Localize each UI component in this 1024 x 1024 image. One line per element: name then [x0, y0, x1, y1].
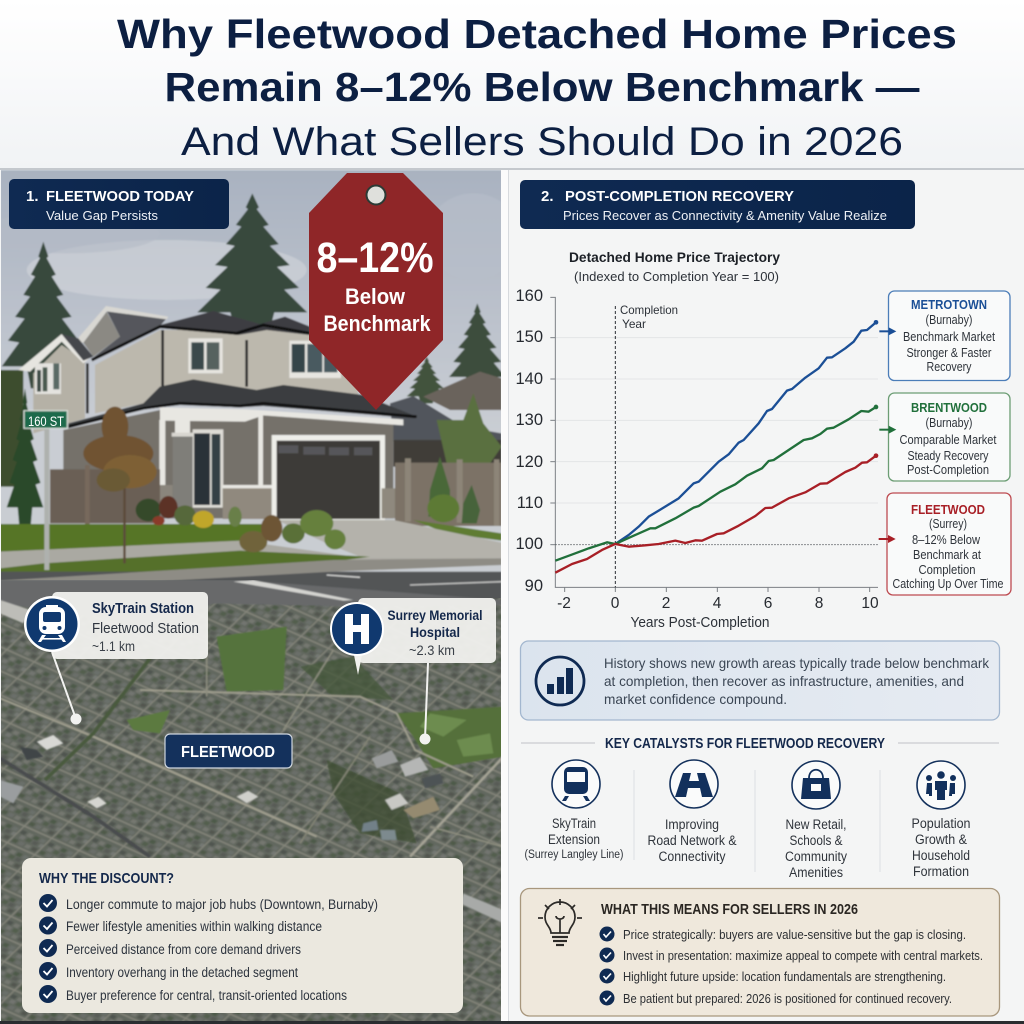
line chart: detached home price trajectory: Detached Home Price Trajectory	[569, 249, 780, 265]
price tag: 8-12% below benchmark: Below	[345, 284, 406, 309]
line chart: detached home price trajectory: Year	[622, 317, 646, 331]
map label: Fleetwood	[165, 734, 292, 768]
section heading 1: Value Gap Persists	[46, 208, 159, 223]
lower storey	[63, 410, 393, 518]
title header	[0, 0, 1024, 170]
panel: what this means for sellers	[520, 888, 1000, 1016]
map label: Fleetwood: FLEETWOOD	[181, 744, 275, 761]
catalyst: SkyTrain extension	[524, 760, 624, 861]
aerial map of Fleetwood	[0, 580, 503, 1024]
legend: Metrotown	[888, 291, 1010, 380]
icon: train	[38, 605, 66, 642]
line chart: detached home price trajectory: 100	[515, 535, 543, 553]
catalyst: retail and schools	[755, 761, 847, 880]
catalyst: population growth: Population	[912, 816, 970, 831]
line chart: detached home price trajectory: 6	[764, 595, 772, 612]
callout: SkyTrain station: Fleetwood Station	[92, 621, 199, 637]
line chart: detached home price trajectory: -2	[557, 595, 571, 612]
section heading 1	[9, 179, 229, 229]
line chart: detached home price trajectory: 110	[517, 494, 543, 512]
catalyst: population growth: Formation	[913, 864, 969, 879]
legend: Brentwood: (Burnaby)	[926, 416, 972, 430]
callout: SkyTrain station: SkyTrain Station	[92, 600, 194, 617]
line chart: detached home price trajectory: 0	[611, 595, 620, 612]
street sign label: 160 ST	[28, 413, 64, 429]
callout: SkyTrain station: ~1.1 km	[92, 638, 135, 654]
checklist: Perceived distance from core demand drivers	[66, 942, 301, 957]
icon: shopping bag	[801, 778, 831, 799]
legend: Brentwood: Post-Completion	[907, 463, 989, 477]
catalyst: population growth: Household	[912, 848, 970, 863]
catalyst: SkyTrain extension: SkyTrain	[552, 816, 596, 831]
seller checklist: Be patient but prepared: 2026 is positioned for continued recovery.	[623, 991, 952, 1006]
legend: Fleetwood: 8–12% Below	[912, 533, 981, 547]
icon: bar chart	[536, 657, 584, 705]
catalyst: population growth	[880, 761, 970, 879]
icon: road	[675, 773, 713, 797]
catalyst: retail and schools: Schools &	[790, 833, 842, 848]
section heading 2: POST-COMPLETION RECOVERY	[565, 188, 794, 205]
callout: history note: History shows new growth areas typically trade below benchmark	[604, 655, 990, 671]
legend: Brentwood	[888, 393, 1010, 481]
catalyst: SkyTrain extension: (Surrey Langley Line)	[524, 849, 624, 861]
callout: Surrey Memorial Hospital: Hospital	[410, 624, 460, 640]
line chart: detached home price trajectory: 130	[515, 411, 543, 429]
line chart: detached home price trajectory	[515, 249, 879, 631]
catalyst: road network: Road Network &	[648, 833, 736, 848]
legend: Fleetwood: FLEETWOOD	[911, 502, 985, 517]
callout: history note: market confidence compound.	[604, 691, 787, 707]
legend: Metrotown: (Burnaby)	[926, 313, 972, 327]
panel: Fleetwood today	[0, 170, 520, 1024]
price tag: 8-12% below benchmark: 8–12%	[316, 234, 434, 282]
legend: Brentwood: Steady Recovery	[908, 449, 989, 463]
legend: Fleetwood: Catching Up Over Time	[892, 577, 1004, 591]
checklist: Inventory overhang in the detached segment	[66, 965, 298, 980]
line chart: detached home price trajectory: 2	[662, 595, 670, 612]
checklist: Fewer lifestyle amenities within walking distance	[66, 919, 322, 934]
catalyst: road network: Connectivity	[658, 849, 726, 864]
title header: Why Fleetwood Detached Home Prices	[117, 11, 957, 57]
line chart: detached home price trajectory: 90	[525, 577, 543, 595]
icon: train	[562, 767, 590, 801]
catalyst: retail and schools: Amenities	[789, 865, 843, 880]
catalyst: retail and schools: New Retail,	[786, 817, 846, 832]
arrows from chart lines to legend boxes	[879, 327, 896, 543]
line chart: detached home price trajectory: 10	[861, 595, 879, 612]
seller checklist: Highlight future upside: location fundamentals are strengthening.	[623, 969, 946, 984]
checklist: Longer commute to major job hubs (Downtown, Burnaby)	[66, 897, 378, 912]
legend: Brentwood: Comparable Market	[900, 433, 997, 447]
line chart: detached home price trajectory: 4	[713, 595, 722, 612]
callout: Surrey Memorial Hospital: ~2.3 km	[409, 643, 455, 658]
section heading 2	[520, 180, 915, 229]
seller checklist	[600, 926, 983, 1006]
callout: Surrey Memorial Hospital: Surrey Memorial	[388, 607, 482, 623]
callout: SkyTrain station	[24, 592, 208, 724]
checklist	[39, 894, 378, 1003]
legend: Metrotown: Benchmark Market	[903, 330, 995, 344]
line chart: detached home price trajectory: 120	[515, 453, 543, 471]
line chart: detached home price trajectory: 8	[815, 595, 823, 612]
price tag: 8-12% below benchmark: Benchmark	[324, 311, 431, 336]
legend: Brentwood: BRENTWOOD	[911, 400, 987, 415]
catalyst: road network	[634, 760, 736, 864]
series: Fleetwood	[555, 456, 876, 573]
section heading 2: Prices Recover as Connectivity & Amenity Value Realize	[563, 208, 887, 223]
heading: key catalysts: KEY CATALYSTS FOR FLEETWOOD RECOVERY	[605, 735, 885, 752]
icon: hospital H	[345, 614, 369, 644]
icon: people	[926, 771, 956, 800]
callout: history note	[520, 641, 1000, 720]
line chart: detached home price trajectory: 140	[515, 370, 543, 388]
legend: Metrotown: Recovery	[926, 360, 972, 374]
photo: house on 160 St	[0, 170, 520, 605]
section heading 1: FLEETWOOD TODAY	[46, 188, 194, 205]
panel: what this means for sellers: WHAT THIS MEANS FOR SELLERS IN 2026	[601, 901, 858, 918]
line chart: detached home price trajectory: 150	[515, 328, 543, 346]
callout: history note: at completion, then recover as infrastructure, amenities, and	[604, 673, 964, 689]
section heading 2: 2.	[541, 188, 554, 205]
legend: Fleetwood	[887, 493, 1011, 595]
title header: And What Sellers Should Do in 2026	[181, 120, 903, 164]
checklist: Buyer preference for central, transit-oriented locations	[66, 988, 347, 1003]
catalyst: population growth: Growth &	[915, 832, 967, 847]
price tag: 8-12% below benchmark	[309, 173, 443, 410]
panel: why the discount: WHY THE DISCOUNT?	[39, 870, 174, 887]
legend: Fleetwood: (Surrey)	[929, 517, 967, 531]
seller checklist: Price strategically: buyers are value-sensitive but the gap is closing.	[623, 927, 966, 942]
line chart: detached home price trajectory: Years Post-Completion	[630, 615, 770, 631]
legend: Metrotown: Stronger & Faster	[906, 346, 992, 360]
line chart: detached home price trajectory: (Indexed to Completion Year = 100)	[574, 269, 779, 284]
catalyst: road network: Improving	[665, 817, 719, 832]
catalyst: SkyTrain extension: Extension	[548, 832, 600, 847]
line chart: detached home price trajectory: 160	[515, 287, 543, 305]
title header: Remain 8–12% Below Benchmark —	[164, 64, 919, 110]
section heading 1: 1.	[26, 188, 39, 205]
series: Brentwood	[555, 407, 876, 561]
catalyst: retail and schools: Community	[785, 849, 847, 864]
panel: why the discount	[22, 858, 463, 1013]
legend: Metrotown: METROTOWN	[911, 297, 987, 312]
line chart: detached home price trajectory: Completion	[620, 303, 678, 317]
icon: light bulb	[538, 899, 582, 945]
series: Metrotown	[615, 322, 876, 544]
callout: Surrey Memorial Hospital	[330, 598, 496, 744]
legend: Fleetwood: Benchmark at	[913, 548, 981, 562]
upper walls	[95, 330, 358, 413]
legend: Fleetwood: Completion	[918, 563, 976, 577]
